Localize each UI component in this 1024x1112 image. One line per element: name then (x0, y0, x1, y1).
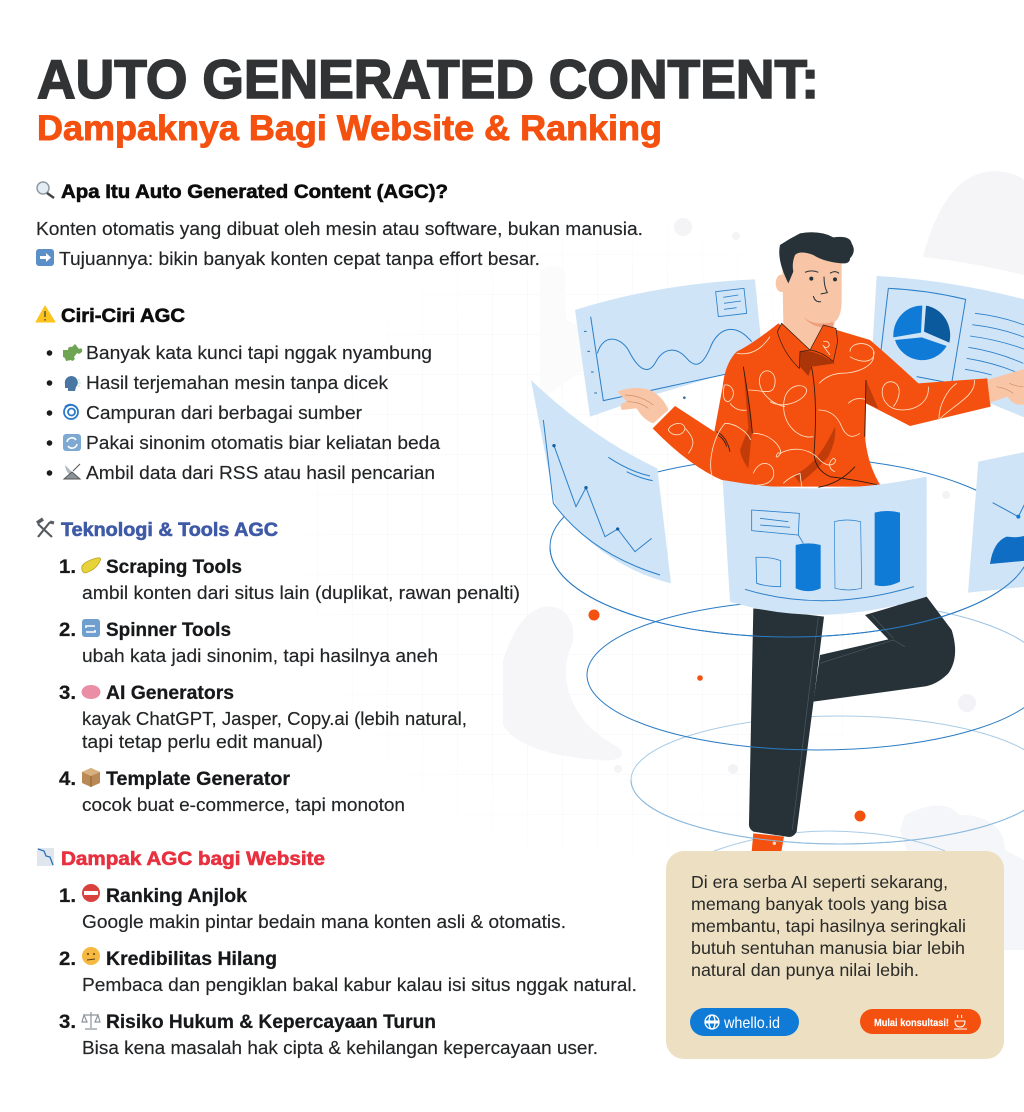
left hand (617, 388, 668, 423)
definition text: Konten otomatis yang dibuat oleh mesin atau software, bukan manusia. (36, 218, 643, 239)
orbit rings behind the figure (550, 457, 1024, 851)
tool 2: Spinner Tools (106, 620, 231, 641)
subtitle: Dampaknya Bagi Website & Ranking (37, 109, 662, 148)
panel: line chart (575, 279, 761, 417)
illustration: man with dashboards, upper body (531, 232, 1024, 593)
tool 4: Template Generator (106, 769, 291, 790)
icon: hammer and wrench (37, 519, 54, 537)
icon: repeat (82, 619, 100, 637)
button: website (690, 1008, 799, 1036)
button: consult (860, 1009, 981, 1034)
background: grid and blobs (270, 171, 1024, 950)
title: AUTO GENERATED CONTENT: (37, 48, 819, 110)
right hand (987, 368, 1024, 405)
impact 2: Pembaca dan pengiklan bakal kabur kalau isi situs nggak natural. (82, 974, 637, 995)
shirt collar (777, 323, 838, 376)
callout card (666, 851, 1004, 1059)
impact 2: Kredibilitas Hilang (106, 949, 277, 970)
tool 1 (59, 557, 520, 603)
tool 1: Scraping Tools (106, 557, 242, 578)
heading: what is AGC: Apa Itu Auto Generated Content (AGC)? (61, 182, 448, 203)
tool 1: ambil konten dari situs lain (duplikat, rawan penalti) (82, 582, 520, 603)
impact 1: Google makin pintar bedain mana konten asli & otomatis. (82, 911, 566, 932)
callout text (691, 872, 966, 980)
impact 1: 1. (59, 886, 76, 907)
tool 3: 3. (59, 683, 76, 704)
bullet dots (47, 350, 52, 476)
purpose text: Tujuannya: bikin banyak konten cepat tanpa effort besar. (59, 248, 540, 269)
impact 3: Risiko Hukum & Kepercayaan Turun (106, 1012, 436, 1033)
tool 4 (59, 768, 405, 815)
callout text: natural dan punya nilai lebih. (691, 960, 919, 980)
callout text: butuh sentuhan manusia biar lebih (691, 938, 965, 958)
tool 3: AI Generators (106, 683, 234, 704)
callout text: membantu, tapi hasilnya seringkali (691, 916, 966, 936)
button: website: whello.id (723, 1015, 780, 1032)
icon: right arrow (36, 249, 54, 266)
icon: speaking head (65, 376, 81, 391)
callout text: Di era serba AI seperti sekarang, (691, 872, 948, 892)
impact 1 (59, 884, 566, 932)
button: consult: Mulai konsultasi! (874, 1018, 949, 1029)
illustration: legs and shoe (749, 597, 955, 852)
icon: magnifier (37, 182, 54, 198)
icon: puzzle (63, 344, 82, 361)
orbit rings in front of the legs (550, 547, 1024, 844)
section: technology and tools (37, 519, 520, 815)
panel: right chart (968, 452, 1024, 593)
icon: scales (82, 1012, 100, 1029)
trait 1: Banyak kata kunci tapi nggak nyambung (86, 342, 432, 363)
tool 3: kayak ChatGPT, Jasper, Copy.ai (lebih natural, (82, 708, 467, 729)
icon: warning (36, 306, 55, 322)
trait 4: Pakai sinonim otomatis biar keliatan beda (86, 432, 441, 453)
icon: package (82, 768, 100, 787)
icon: refresh (63, 434, 81, 451)
trait 2: Hasil terjemahan mesin tanpa dicek (86, 372, 389, 393)
tool 2: ubah kata jadi sinonim, tapi hasilnya aneh (82, 645, 438, 666)
tool 3: tapi tetap perlu edit manual) (82, 731, 323, 752)
icon: no entry (82, 884, 100, 902)
heading: impact: Dampak AGC bagi Website (61, 849, 325, 870)
panel: bar chart (723, 477, 927, 615)
impact 2: 2. (59, 949, 76, 970)
panel: zigzag chart (531, 380, 671, 583)
icon: satellite dish (64, 464, 80, 479)
icon: chart down (37, 848, 54, 866)
callout text: memang banyak tools yang bisa (691, 894, 947, 914)
icon: coffee cup (954, 1015, 967, 1029)
tool 2 (59, 619, 438, 666)
tool 1: 1. (59, 557, 76, 578)
orange dots (588, 610, 866, 822)
icon: brain (82, 685, 100, 699)
tool 4: 4. (59, 769, 76, 790)
impact 2 (59, 947, 637, 995)
icon: confused face (82, 947, 100, 965)
trait 5: Ambil data dari RSS atau hasil pencarian (86, 462, 435, 483)
icon: sponge (82, 558, 101, 573)
section: impact on website (37, 848, 637, 1058)
section: what is AGC (36, 182, 643, 269)
icon: globe (705, 1015, 719, 1029)
trait 3: Campuran dari berbagai sumber (86, 402, 362, 423)
impact 3: 3. (59, 1012, 76, 1033)
head and neck (776, 232, 854, 351)
tool 2: 2. (59, 620, 76, 641)
icon: cyclone (64, 405, 78, 419)
impact 3: Bisa kena masalah hak cipta & kehilangan kepercayaan user. (82, 1037, 598, 1058)
heading: traits: Ciri-Ciri AGC (61, 306, 185, 327)
shirt torso and arms (653, 323, 991, 487)
section: AGC traits (36, 306, 441, 483)
tool 3 (59, 683, 467, 752)
heading: tools: Teknologi & Tools AGC (61, 520, 278, 541)
impact 1: Ranking Anjlok (106, 886, 247, 907)
tool 4: cocok buat e-commerce, tapi monoton (82, 794, 405, 815)
impact 3 (59, 1012, 598, 1058)
panel: pie chart (872, 276, 1024, 418)
